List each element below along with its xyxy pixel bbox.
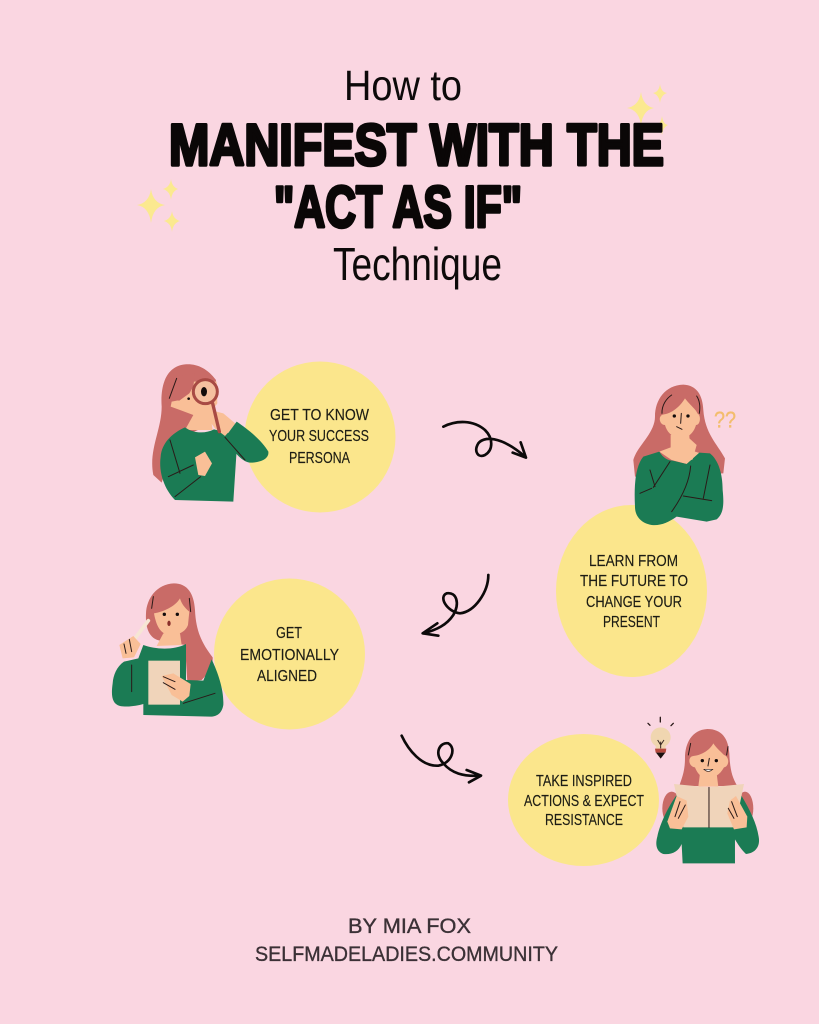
panel: step 1 circle with text bbox=[244, 362, 396, 512]
footer: author: BY MIA FOX bbox=[348, 915, 471, 938]
title line: Manifest with the: MANIFEST WITH THE bbox=[169, 113, 664, 178]
arrow: step 3 to step 4 bbox=[402, 736, 481, 782]
panel: step 4 circle with text bbox=[508, 734, 659, 866]
icon: light bulb bbox=[648, 717, 673, 759]
panel: step 2 circle with text: CHANGE YOUR bbox=[586, 594, 682, 611]
panel: step 2 circle with text: LEARN FROM bbox=[589, 553, 678, 570]
footer: website: SELFMADELADIES.COMMUNITY bbox=[255, 943, 558, 966]
sparkles: top right bbox=[627, 84, 668, 135]
panel: step 2 circle with text: THE FUTURE TO bbox=[580, 573, 688, 590]
title line: How to: How to bbox=[344, 62, 462, 110]
illustration: woman thinking with question marks bbox=[633, 385, 736, 525]
panel: step 3 circle with text: GET bbox=[276, 625, 302, 642]
title bbox=[169, 62, 664, 290]
icon: question marks: ?? bbox=[714, 406, 736, 432]
sparkles: left bbox=[137, 179, 180, 232]
title line: Technique: Technique bbox=[333, 238, 502, 290]
panel: step 2 circle with text bbox=[556, 505, 707, 677]
panel: step 3 circle with text bbox=[214, 578, 365, 730]
panel: step 4 circle with text: TAKE INSPIRED bbox=[536, 773, 632, 790]
panel: step 1 circle with text: YOUR SUCCESS bbox=[269, 428, 369, 445]
arrow: step 1 to step 2 bbox=[443, 422, 526, 458]
panel: step 2 circle with text: PRESENT bbox=[603, 614, 660, 631]
illustration: woman with pencil and notepad bbox=[112, 583, 223, 717]
panel: step 1 circle with text: PERSONA bbox=[289, 450, 351, 467]
panel: step 3 circle with text: ALIGNED bbox=[257, 668, 317, 685]
arrow: step 2 to step 3 bbox=[423, 575, 488, 636]
illustration: woman with magnifying glass bbox=[152, 364, 268, 502]
panel: step 1 circle with text: GET TO KNOW bbox=[270, 407, 369, 424]
panel: step 3 circle with text: EMOTIONALLY bbox=[240, 647, 339, 664]
title line: Act as if: "ACT AS IF" bbox=[274, 175, 522, 240]
panel: step 4 circle with text: ACTIONS & EXPECT bbox=[524, 793, 644, 810]
panel: step 4 circle with text: RESISTANCE bbox=[545, 812, 623, 829]
footer bbox=[255, 915, 558, 966]
illustration: woman reading with light bulb bbox=[648, 717, 759, 863]
